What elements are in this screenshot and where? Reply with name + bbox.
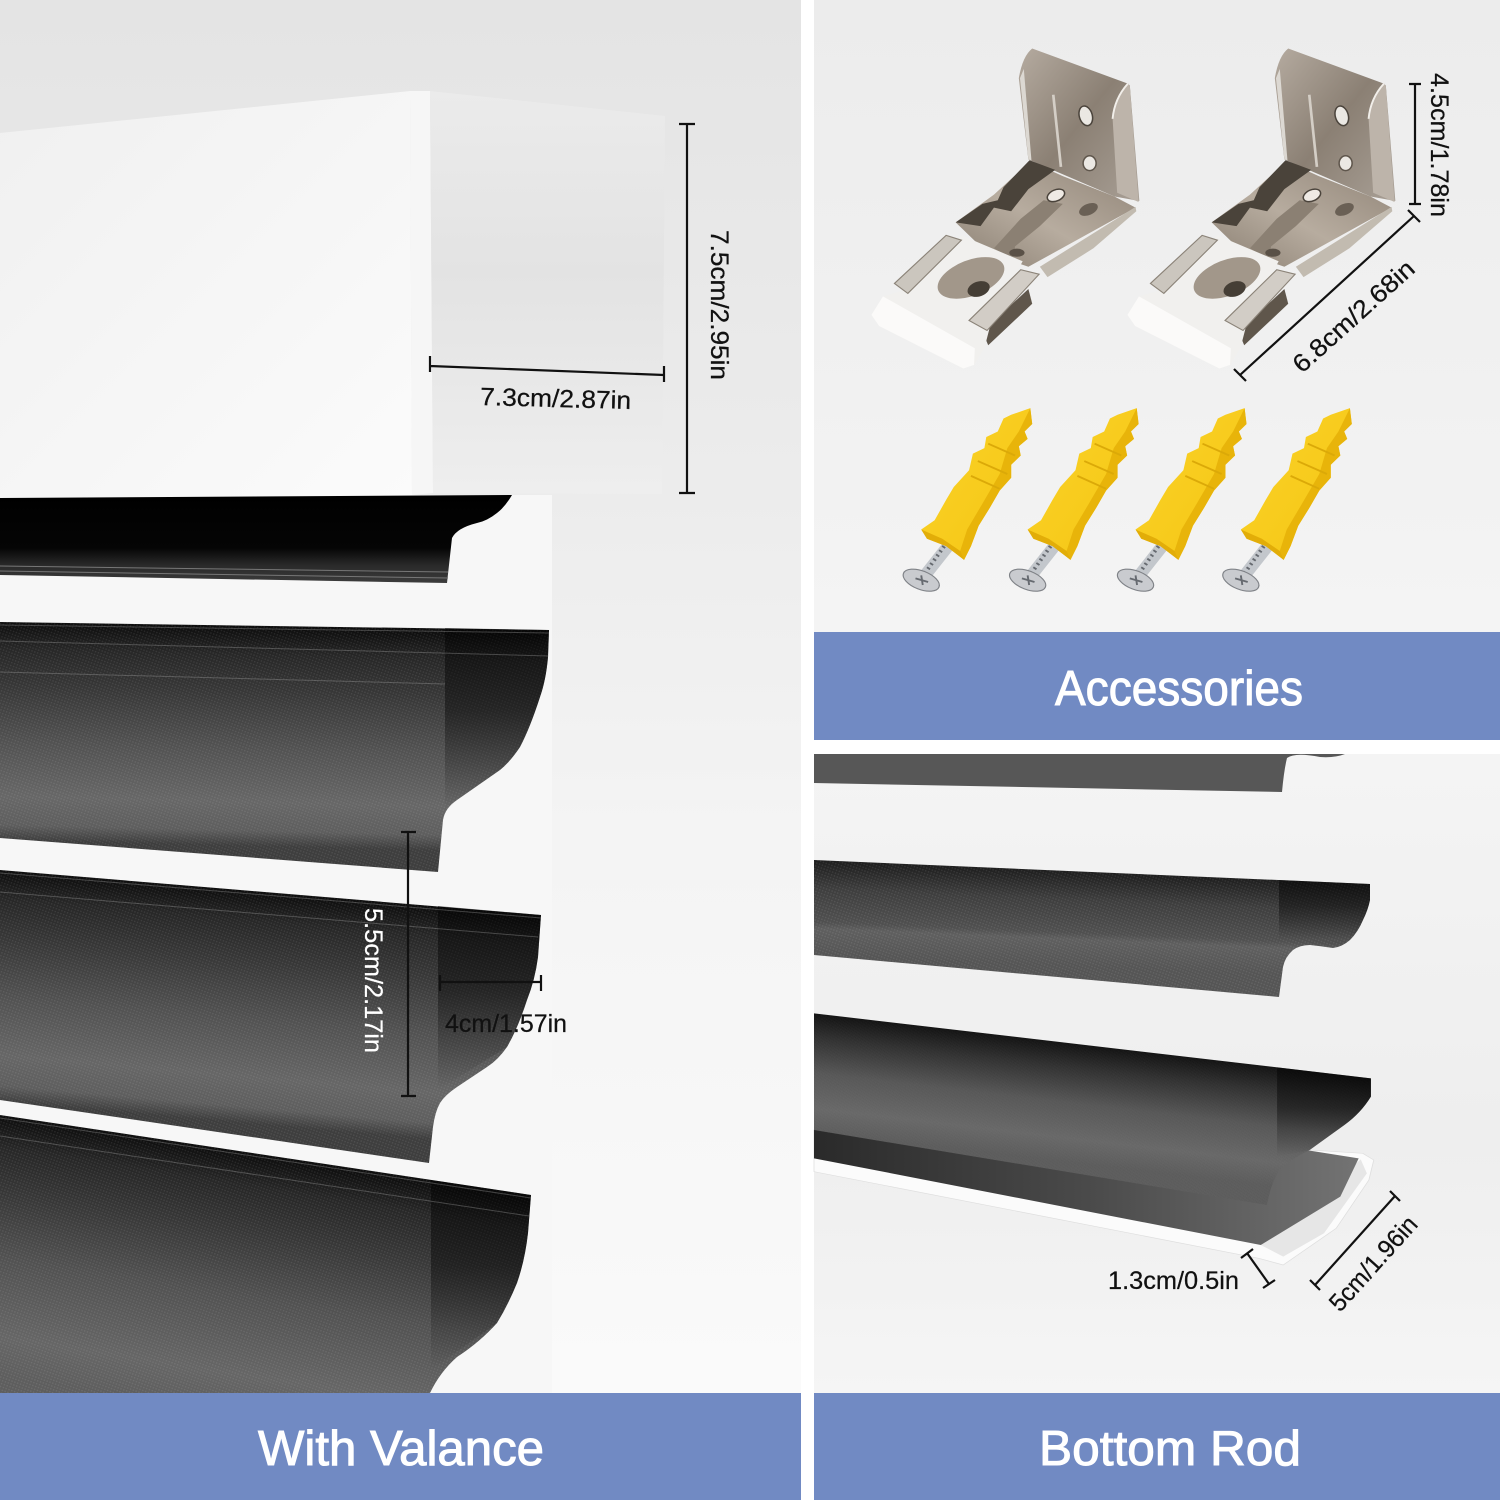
dimension: vane height: 5.5cm/2.17in [359, 908, 387, 1053]
vane 2 [0, 622, 549, 872]
dimension: valance height [679, 124, 733, 493]
icon: bracket left [871, 48, 1139, 369]
bottom rod group [814, 1013, 1374, 1265]
lower vane weave [814, 1013, 1371, 1205]
dimension: bracket depth [1234, 210, 1420, 381]
valance edge [410, 91, 433, 495]
top vane [814, 754, 1345, 792]
label: accessories: Accessories [1055, 662, 1303, 716]
icon: wall anchor 2 [1006, 408, 1139, 596]
dimension: bracket depth: 6.8cm/2.68in [1287, 255, 1420, 378]
middle vane [814, 860, 1370, 997]
icon: bracket right [1127, 48, 1395, 369]
panel: bottom rod [814, 754, 1500, 1393]
dimension: rod height [1108, 1249, 1275, 1295]
dimension: rod width: 5cm/1.96in [1324, 1211, 1423, 1317]
dimension: bracket height [1409, 73, 1453, 217]
icon: wall anchor 3 [1114, 408, 1247, 596]
vane 1 [0, 495, 512, 583]
white rod [814, 1130, 1374, 1265]
panel: accessories [814, 0, 1500, 632]
grey plate [814, 1128, 1359, 1245]
label: bottom rod [814, 1393, 1500, 1500]
panel: with valance [0, 0, 801, 1393]
dimension: valance depth: 7.3cm/2.87in [480, 383, 632, 415]
icon: wall anchor 4 [1220, 408, 1352, 596]
dimension: valance height: 7.5cm/2.95in [705, 230, 733, 380]
dimension: rod height: 1.3cm/0.5in [1108, 1267, 1239, 1295]
lower vane end [1277, 1067, 1371, 1157]
dimension: vane depth: 4cm/1.57in [445, 1010, 567, 1038]
label: accessories [814, 632, 1500, 740]
vane 4 [0, 1115, 531, 1393]
icon: wall anchor 1 [900, 408, 1032, 596]
sheer fabric backing [0, 495, 552, 1393]
dimension: vane height [359, 832, 416, 1096]
valance side face [430, 91, 665, 494]
label: with valance: With Valance [258, 1422, 544, 1476]
dimension: vane depth [440, 975, 567, 1038]
label: bottom rod: Bottom Rod [1039, 1422, 1301, 1476]
label: with valance [0, 1393, 801, 1500]
dimension: valance depth [430, 356, 664, 415]
vane 3 [0, 870, 541, 1163]
dimension: bracket height: 4.5cm/1.78in [1425, 73, 1453, 217]
rod end [1261, 1159, 1367, 1257]
valance front face [0, 91, 412, 498]
lower vane [814, 1013, 1371, 1205]
